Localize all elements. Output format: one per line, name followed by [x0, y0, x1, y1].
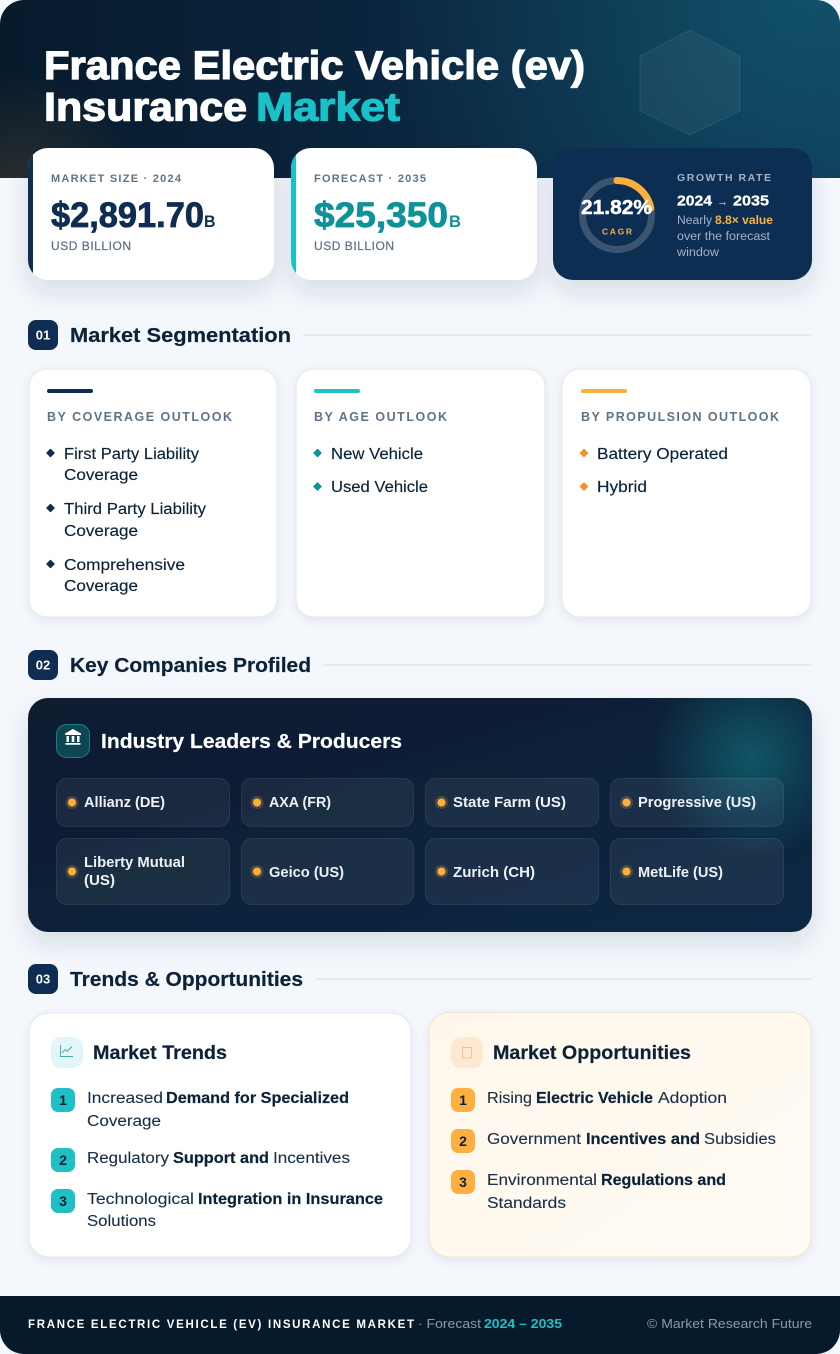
opportunity 3: Environmental	[487, 1172, 597, 1189]
company: Liberty Mutual: (US)	[84, 873, 115, 889]
panel title: Market Opportunities	[493, 1042, 691, 1064]
title: Market	[256, 86, 400, 130]
panel: by propulsion outlook: Hybrid	[597, 479, 647, 496]
panel: forecast 2035: USD BILLION	[314, 239, 394, 253]
opportunity 2	[451, 1129, 776, 1153]
panel: by age outlook: BY AGE OUTLOOK	[314, 410, 447, 424]
trend 1	[51, 1088, 349, 1130]
company: Geico: Geico (US)	[269, 865, 344, 881]
text block: growth rate detail: Nearly	[677, 215, 712, 227]
footer: © Market Research Future	[647, 1317, 812, 1331]
company: Allianz: Allianz (DE)	[84, 795, 165, 811]
icon: institution building	[56, 724, 90, 758]
panel: by propulsion outlook: Battery Operated	[597, 446, 728, 463]
company: Progressive: Progressive (US)	[638, 795, 756, 811]
panel: by age outlook	[296, 369, 545, 617]
trend 2	[51, 1148, 350, 1172]
company: Allianz	[56, 778, 230, 826]
trend 2: 2	[59, 1152, 67, 1168]
trend 3: Integration in Insurance	[198, 1191, 383, 1208]
opportunity 3	[451, 1170, 726, 1212]
title: Insurance	[44, 86, 247, 130]
opportunity 1	[451, 1088, 727, 1112]
trend 2: Support and	[173, 1150, 269, 1167]
heading: 03 trends and opportunities: Trends & Opportunities	[70, 968, 303, 991]
panel: by coverage outlook: Coverage	[64, 578, 138, 595]
company: AXA: AXA (FR)	[269, 795, 331, 811]
heading: 03 trends and opportunities	[28, 964, 812, 994]
company: Zurich	[426, 838, 598, 904]
panel: by propulsion outlook: BY PROPULSION OUTLOOK	[581, 410, 779, 424]
panel: market size 2024: $2,891.70	[51, 196, 204, 235]
company: Geico	[242, 838, 414, 904]
company: State Farm	[426, 778, 598, 826]
trend 3: Solutions	[87, 1213, 156, 1230]
panel: by coverage outlook: Comprehensive	[64, 557, 185, 574]
company: MetLife	[610, 838, 784, 904]
panel: by propulsion outlook	[562, 369, 811, 617]
panel: by coverage outlook: Coverage	[64, 523, 138, 540]
text block: growth rate detail: 8.8× value	[715, 215, 773, 227]
trend 1: Demand for Specialized	[166, 1090, 349, 1107]
title: France Electric Vehicle (ev)	[44, 44, 585, 88]
heading: 02 key companies profiled	[28, 650, 812, 680]
opportunity 3: Regulations and	[601, 1172, 726, 1189]
panel: forecast 2035: FORECAST · 2035	[314, 173, 426, 185]
opportunity 1: Electric Vehicle	[536, 1090, 653, 1107]
heading: 01 market segmentation: 01	[36, 328, 50, 342]
panel: forecast 2035: B	[449, 212, 461, 231]
company: Progressive	[610, 778, 784, 826]
panel: market trends	[29, 1013, 411, 1257]
panel: growth rate	[553, 148, 812, 280]
company: Zurich: Zurich (CH)	[453, 865, 535, 881]
panel: market size 2024: USD BILLION	[51, 239, 131, 253]
panel: by coverage outlook: Third Party Liability	[64, 501, 206, 518]
chart: CAGR ring: CAGR	[602, 226, 632, 236]
opportunity 3: 3	[459, 1174, 467, 1190]
header band	[0, 0, 840, 178]
opportunity 2: Subsidies	[704, 1131, 776, 1148]
heading: 02 key companies profiled: Key Companies Profiled	[70, 654, 311, 677]
trend 2: Incentives	[273, 1150, 350, 1167]
trend 3	[51, 1189, 383, 1230]
panel: market size 2024	[28, 148, 274, 280]
company: MetLife: MetLife (US)	[638, 865, 723, 881]
opportunity 1: 1	[459, 1092, 467, 1108]
heading: 03 trends and opportunities: 03	[36, 972, 50, 986]
panel: forecast 2035: $25,350	[314, 196, 448, 235]
panel title: Industry Leaders & Producers	[101, 730, 402, 753]
chart: CAGR ring: 21.82%	[581, 196, 652, 219]
panel: by age outlook: New Vehicle	[331, 446, 423, 463]
chart: CAGR ring	[581, 180, 652, 250]
text block: growth rate detail: GROWTH RATE	[677, 172, 771, 184]
trend 1: Increased	[87, 1090, 163, 1107]
heading: 01 market segmentation	[28, 320, 812, 350]
company: Liberty Mutual	[56, 838, 230, 904]
trend 2: Regulatory	[87, 1150, 169, 1167]
panel title: Market Trends	[93, 1042, 227, 1064]
icon: decorative hexagon	[640, 30, 740, 135]
company: State Farm: State Farm (US)	[453, 795, 566, 811]
panel: forecast 2035	[291, 148, 537, 280]
panel: market opportunities	[429, 1012, 811, 1257]
opportunity 3: Standards	[487, 1195, 566, 1212]
company: Liberty Mutual: Liberty Mutual	[84, 855, 185, 871]
heading: 01 market segmentation: Market Segmentation	[70, 324, 291, 347]
heading: 02 key companies profiled: 02	[36, 658, 50, 672]
panel: by age outlook: Used Vehicle	[331, 479, 428, 496]
footer: 2024 – 2035	[484, 1317, 562, 1331]
panel: by coverage outlook: Coverage	[64, 467, 138, 484]
opportunity 2: Government	[487, 1131, 582, 1148]
opportunity 2: 2	[459, 1133, 467, 1149]
icon: chart trend	[51, 1037, 83, 1068]
text block: growth rate detail: →	[717, 193, 728, 210]
title	[44, 44, 585, 130]
text block: growth rate detail	[676, 172, 773, 259]
trend 1: Coverage	[87, 1113, 161, 1130]
text block: growth rate detail: over the forecast	[677, 231, 771, 243]
panel: by coverage outlook: BY COVERAGE OUTLOOK	[47, 410, 232, 424]
trend 1: 1	[59, 1092, 67, 1108]
text block: growth rate detail: 2024	[677, 194, 712, 210]
icon: missing glyph box	[451, 1037, 483, 1068]
panel: by coverage outlook: First Party Liability	[64, 446, 199, 463]
footer: FRANCE ELECTRIC VEHICLE (EV) INSURANCE MARKET	[28, 1319, 414, 1331]
opportunity 2: Incentives and	[586, 1131, 700, 1148]
trend 3: Technological	[87, 1191, 194, 1208]
text block: growth rate detail: window	[676, 247, 720, 259]
trend 3: 3	[59, 1193, 67, 1209]
text block: growth rate detail: 2035	[733, 194, 769, 210]
opportunity 1: Rising	[487, 1090, 532, 1107]
footer	[0, 1296, 840, 1354]
company: AXA	[242, 778, 414, 826]
panel: by coverage outlook	[29, 369, 277, 617]
panel: industry leaders	[28, 698, 812, 932]
opportunity 1: Adoption	[658, 1090, 727, 1107]
footer: · Forecast	[418, 1317, 482, 1331]
panel: market size 2024: MARKET SIZE · 2024	[51, 173, 182, 185]
panel: market size 2024: B	[204, 212, 216, 231]
